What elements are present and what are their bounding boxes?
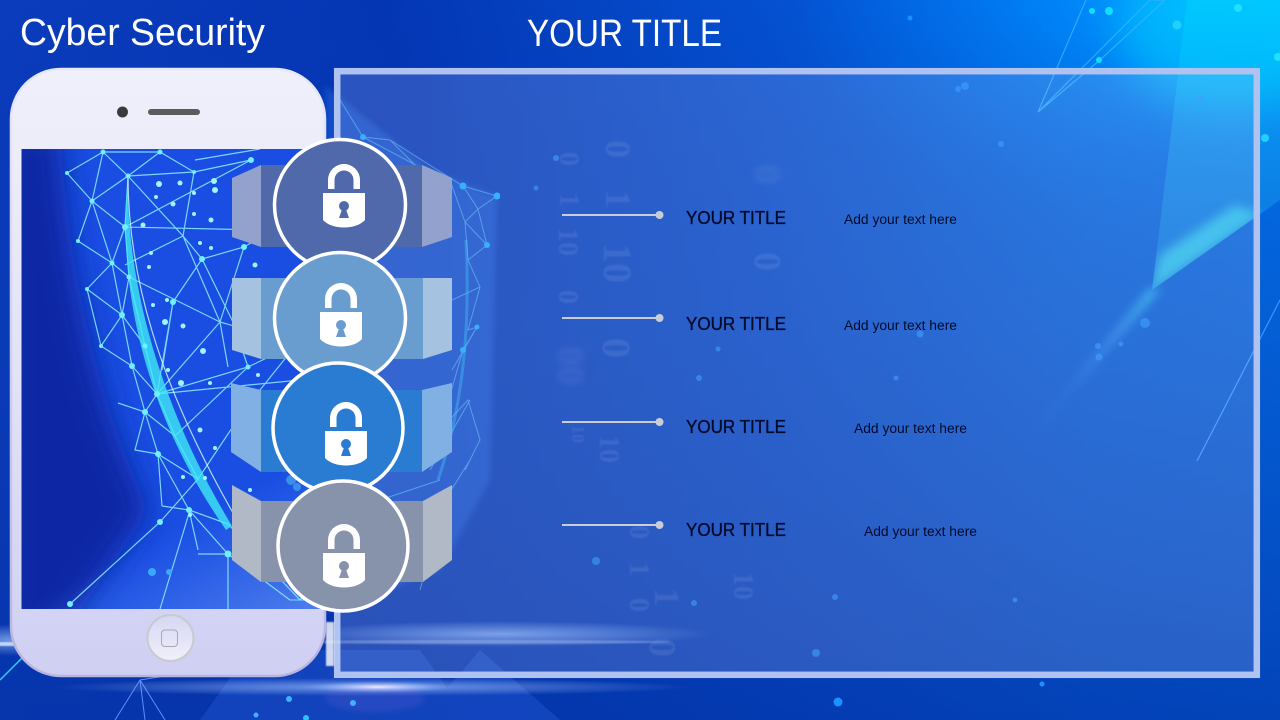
list item 2: YOUR TITLE: [686, 313, 786, 334]
heading: YOUR TITLE: YOUR TITLE: [527, 13, 722, 55]
panel decoration: binary digits: 0: [594, 338, 639, 358]
ribbon 4: [232, 485, 452, 582]
panel decoration: binary digits: 0: [598, 140, 638, 158]
icon: padlock 3: [325, 402, 367, 466]
icon: padlock 1: [323, 164, 365, 228]
light flare: middle band: [0, 621, 710, 666]
icon: padlock 2: [320, 283, 362, 346]
shield glow behind panel: [325, 85, 497, 612]
panel decoration: binary digits: 0: [623, 598, 654, 612]
main glowing curve left: [126, 176, 232, 530]
network graphic: [65, 100, 500, 612]
phone: [0, 69, 326, 676]
panel decoration: bokeh dots: [534, 82, 1204, 657]
list item 4: YOUR TITLE: [686, 519, 786, 540]
ribbon 1: [232, 165, 452, 247]
circle badge 4 with lock: [278, 481, 408, 611]
circle badge 2 with lock: [274, 252, 406, 384]
glowing curve right: [438, 240, 467, 480]
sparkle dots on screen: [140, 178, 260, 517]
list item 3: YOUR TITLE: [686, 416, 786, 437]
phone speaker: [148, 109, 200, 115]
panel decoration: binary digits: 0: [552, 290, 583, 304]
phone home button: [148, 615, 194, 661]
list item 3: [562, 416, 967, 437]
panel decoration: binary digits: 10: [595, 243, 640, 283]
panel decoration: binary digits: 0: [641, 638, 683, 657]
panel decoration: binary digits: [549, 140, 788, 657]
list item 1: YOUR TITLE: [686, 207, 786, 228]
network mesh right: [340, 100, 497, 590]
panel decoration: binary digits: 0: [746, 165, 788, 184]
panel decoration: binary digits: 0: [553, 152, 584, 166]
list item 1: Add your text here: [844, 212, 957, 227]
phone body: [11, 69, 325, 676]
list item 4: Add your text here: [864, 524, 977, 539]
panel decoration: binary digits: 10: [568, 425, 588, 443]
panel: content frame: [337, 71, 1257, 675]
circle badge 1 with lock: [274, 140, 406, 270]
list item 2: Add your text here: [844, 318, 957, 333]
list item 1: [562, 207, 957, 228]
panel decoration: binary digits: 1: [623, 562, 654, 576]
panel decoration: binary digits: 0: [623, 525, 654, 539]
ribbon 3: [231, 383, 452, 472]
panel decoration: binary digits: 10: [593, 435, 624, 463]
panel decoration: binary digits: 1: [553, 193, 584, 207]
network nodes: [65, 134, 500, 607]
circle badge 3 with lock: [273, 363, 403, 493]
ribbon 2: [232, 278, 452, 359]
phone screen: [22, 149, 321, 609]
icon: padlock 4: [323, 524, 365, 588]
panel decoration: binary digits: 1: [598, 190, 638, 208]
phone camera: [117, 106, 128, 118]
list item 2: [562, 313, 957, 334]
heading: Cyber Security: Cyber Security: [20, 12, 265, 54]
panel decoration: binary digits: 1: [647, 588, 687, 606]
list item 4: [562, 519, 977, 540]
panel decoration: binary digits: 00: [549, 347, 591, 385]
panel decoration: binary digits: 0: [746, 252, 788, 271]
panel decoration: binary digits: 10: [727, 572, 758, 600]
panel decoration: binary digits: 10: [552, 228, 583, 256]
network mesh left: [67, 149, 325, 609]
light flare: bottom band: [50, 678, 1044, 720]
list item 3: Add your text here: [854, 421, 967, 436]
